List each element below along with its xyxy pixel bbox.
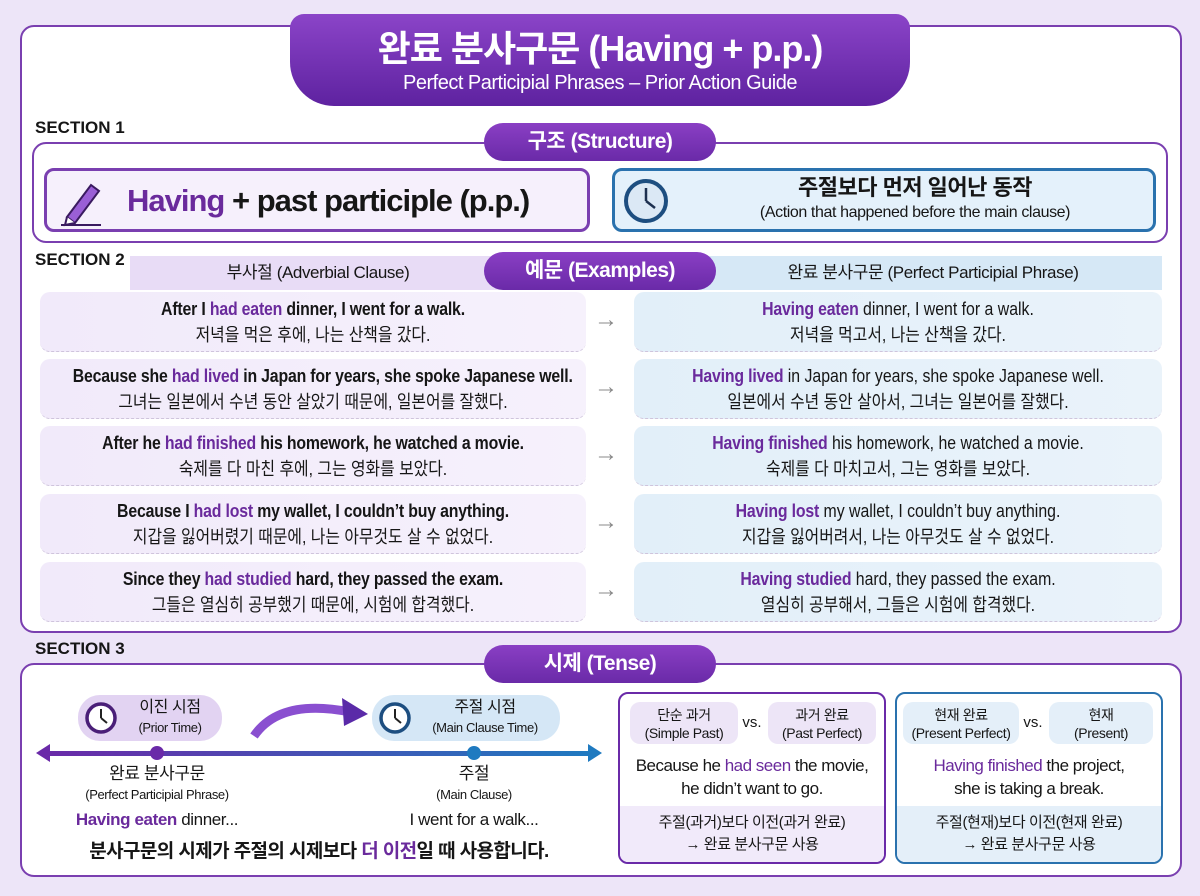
icon: clock — [624, 179, 668, 223]
right header: 완료 분사구문 (Perfect Participial Phrase) — [787, 263, 1079, 282]
compare box: past: he didn’t want to go. — [681, 779, 823, 798]
prior action text — [760, 175, 1070, 221]
example rows: → — [594, 440, 618, 467]
main label — [410, 764, 538, 829]
prior label: 완료 분사구문 — [109, 764, 205, 783]
row 1: 저녁을 먹은 후에, 나는 산책을 갔다. — [196, 325, 430, 345]
compare box: present: (Present) — [1074, 725, 1128, 741]
row 4: Because I had lost my wallet, I couldn’t buy anything. — [117, 501, 509, 521]
pill: examples: 예문 (Examples) — [525, 259, 675, 282]
timeline line — [36, 744, 602, 762]
compare box: present: → 완료 분사구문 사용 — [962, 836, 1096, 853]
icon: pen — [61, 184, 101, 226]
pill: structure: 구조 (Structure) — [528, 130, 672, 153]
example rows: → — [594, 306, 618, 333]
compare box: past: 주절(과거)보다 이전(과거 완료) — [659, 814, 845, 831]
prior label: (Perfect Participial Phrase) — [85, 787, 229, 802]
example rows: Having studied hard, they passed the exam. — [740, 569, 1056, 589]
main label: 주절 — [459, 764, 489, 783]
timeline — [36, 695, 602, 862]
row 3 — [40, 426, 586, 486]
row 5: 그들은 열심히 공부했기 때문에, 시험에 합격했다. — [152, 595, 474, 615]
example rows: → — [594, 373, 618, 400]
pill: examples — [484, 252, 716, 290]
subtitle: Perfect Participial Phrases – Prior Action Guide — [403, 72, 797, 94]
structure formula box — [44, 168, 590, 232]
example rows: 저녁을 먹고서, 나는 산책을 갔다. — [790, 325, 1006, 345]
compare box: past — [618, 692, 886, 864]
example rows: Having lost my wallet, I couldn’t buy anything. — [736, 501, 1060, 521]
main label: (Main Clause) — [436, 787, 512, 802]
compare box: past: 과거 완료 — [795, 707, 849, 723]
row 1: After I had eaten dinner, I went for a walk. — [161, 299, 465, 319]
prior label — [76, 764, 238, 829]
prior time pill: (Prior Time) — [138, 720, 202, 735]
compare box: present: Having finished the project, — [933, 756, 1125, 775]
compare box: present: (Present Perfect) — [911, 725, 1010, 741]
title: 완료 분사구문 (Having + p.p.) — [378, 28, 822, 69]
section 1 label: SECTION 1 — [35, 118, 125, 137]
compare box: past: 단순 과거 — [657, 707, 711, 723]
main label: I went for a walk... — [410, 810, 538, 829]
example rows: → — [594, 508, 618, 535]
row 1 — [40, 292, 586, 352]
section 3 label: SECTION 3 — [35, 639, 125, 658]
row 5: Since they had studied hard, they passed the exam. — [123, 569, 503, 589]
example rows: 숙제를 다 마치고서, 그는 영화를 보았다. — [766, 459, 1030, 479]
formula text: Having + past participle (p.p.) — [127, 183, 529, 218]
row 2 — [40, 359, 586, 419]
prior action box — [612, 168, 1156, 232]
compare box: present: vs. — [1023, 714, 1043, 731]
row 2: 그녀는 일본에서 수년 동안 살았기 때문에, 일본어를 잘했다. — [118, 392, 508, 412]
example rows: Having finished his homework, he watched a movie. — [712, 433, 1084, 453]
compare box: past: vs. — [742, 714, 762, 731]
compare box: present — [895, 692, 1163, 864]
main card — [20, 25, 1182, 633]
compare box: present: 주절(현재)보다 이전(현재 완료) — [936, 814, 1122, 831]
pill: tense: 시제 (Tense) — [544, 652, 656, 675]
row 4: 지갑을 잃어버렸기 때문에, 나는 아무것도 살 수 없었다. — [133, 527, 493, 547]
row 3: After he had finished his homework, he watched a movie. — [102, 433, 524, 453]
pill: tense — [484, 645, 716, 683]
row 5 — [40, 562, 586, 622]
main clause time pill: (Main Clause Time) — [432, 720, 538, 735]
prior time pill: 이진 시점 — [139, 699, 201, 716]
main clause time pill — [372, 695, 560, 741]
section 1 box — [32, 142, 1168, 243]
compare box: present: 현재 완료 — [934, 707, 988, 723]
example rows: 지갑을 잃어버려서, 나는 아무것도 살 수 없었다. — [742, 527, 1054, 547]
compare box: past: Because he had seen the movie, — [636, 756, 868, 775]
section 3 box — [20, 663, 1182, 877]
example rows: 열심히 공부해서, 그들은 시험에 합격했다. — [761, 595, 1035, 615]
title banner — [290, 14, 910, 106]
prior time pill — [78, 695, 222, 741]
prior label: Having eaten dinner... — [76, 810, 238, 829]
example rows: Having eaten dinner, I went for a walk. — [762, 299, 1034, 319]
row 3: 숙제를 다 마친 후에, 그는 영화를 보았다. — [179, 459, 447, 479]
left header: 부사절 (Adverbial Clause) — [227, 263, 409, 282]
compare box: present: 현재 — [1089, 707, 1113, 723]
example rows: → — [594, 576, 618, 603]
example rows — [40, 292, 1162, 622]
main clause time pill: 주절 시점 — [454, 699, 516, 716]
pill: structure — [484, 123, 716, 161]
compare box: present: she is taking a break. — [954, 779, 1104, 798]
section 2 label: SECTION 2 — [35, 250, 125, 269]
timeline note: 분사구문의 시제가 주절의 시제보다 더 이전일 때 사용합니다. — [89, 841, 549, 862]
right header — [634, 256, 1162, 290]
example rows: Having lived in Japan for years, she spoke Japanese well. — [692, 366, 1104, 386]
compare box: past: (Simple Past) — [645, 725, 723, 741]
left header — [130, 256, 586, 290]
prior action text: 주절보다 먼저 일어난 동작 — [798, 175, 1032, 200]
compare box: past: → 완료 분사구문 사용 — [685, 836, 819, 853]
row 2: Because she had lived in Japan for years, she spoke Japanese well. — [73, 366, 573, 386]
curved arrow — [250, 698, 368, 738]
prior action text: (Action that happened before the main clause) — [760, 204, 1070, 221]
row 4 — [40, 494, 586, 554]
example rows: 일본에서 수년 동안 살아서, 그녀는 일본어를 잘했다. — [727, 392, 1069, 412]
compare box: past: (Past Perfect) — [782, 725, 862, 741]
